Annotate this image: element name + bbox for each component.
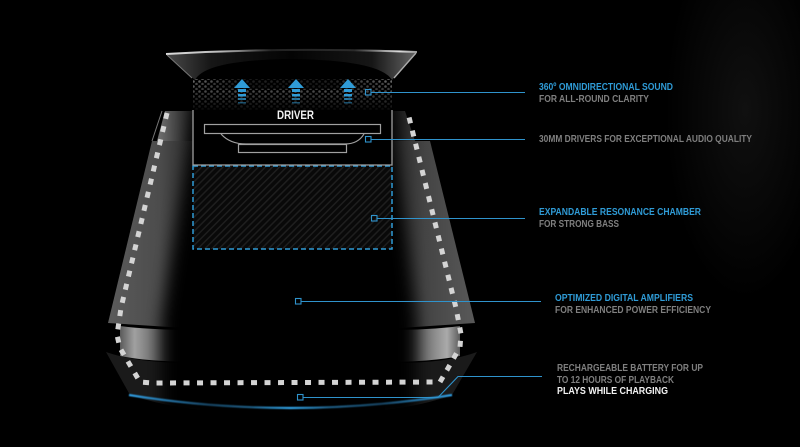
resonance chamber: [193, 166, 392, 249]
arrows: sound direction: [234, 79, 356, 104]
left lower band: [120, 326, 200, 362]
blue charging glow: [129, 395, 452, 408]
background: faint ghost speaker: [665, 0, 800, 300]
right collar: [385, 111, 415, 141]
arrow 3: [340, 79, 356, 104]
leader: omnidirectional sound: [366, 90, 525, 95]
left base: [106, 352, 200, 410]
callout: drivers: 30MM DRIVERS FOR EXCEPTIONAL AUDIO QUALITY: [539, 133, 752, 145]
right base: [385, 352, 477, 410]
left body shell: [108, 141, 200, 329]
callout: amplifiers: [555, 292, 711, 316]
callout: battery: [557, 362, 703, 397]
arrow 2: [288, 79, 304, 104]
callout: resonance chamber: [539, 206, 701, 230]
callout: amplifiers: OPTIMIZED DIGITAL AMPLIFIERS: [555, 292, 693, 304]
driver diagram: [193, 110, 392, 165]
driver label: DRIVER: [277, 110, 315, 122]
callout: omnidirectional sound: [539, 81, 673, 105]
speaker body: [106, 105, 477, 420]
leader: battery: [298, 376, 542, 400]
leader: chamber: [372, 216, 525, 221]
leader: amplifiers: [296, 298, 541, 304]
dotted battery outline: [117, 113, 461, 383]
right body shell: [385, 141, 475, 329]
arrow 1: [234, 79, 250, 104]
callout: resonance chamber: FOR STRONG BASS: [539, 218, 619, 230]
leader: driver: [366, 136, 525, 142]
callout: omnidirectional sound: FOR ALL-ROUND CLARITY: [539, 93, 649, 105]
callout: resonance chamber: EXPANDABLE RESONANCE CHAMBER: [539, 206, 701, 218]
callout: omnidirectional sound: 360º OMNIDIRECTIONAL SOUND: [539, 81, 673, 93]
callout: battery: PLAYS WHILE CHARGING: [557, 385, 668, 397]
centre fade: [162, 105, 416, 420]
leader lines: [296, 90, 542, 400]
callout: battery: TO 12 HOURS OF PLAYBACK: [557, 374, 674, 386]
callout: amplifiers: FOR ENHANCED POWER EFFICIENCY: [555, 304, 711, 316]
collar edge: [152, 111, 162, 141]
left collar: [157, 111, 200, 141]
speaker top dish: [166, 49, 417, 80]
callout: battery: RECHARGEABLE BATTERY FOR UP: [557, 362, 703, 374]
right lower band: [385, 326, 460, 362]
speaker grill: [193, 79, 392, 110]
